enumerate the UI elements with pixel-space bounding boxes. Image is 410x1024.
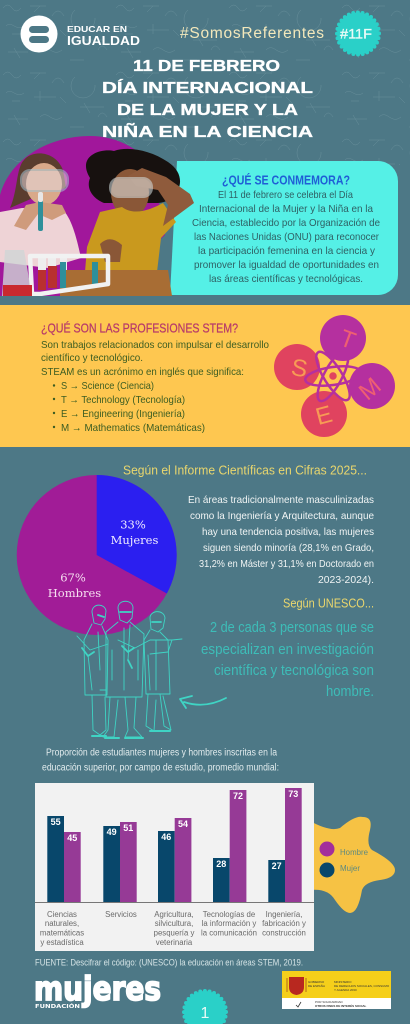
body text: Internacional de la Mujer y la Niña en la — [199, 204, 373, 215]
bar chart: 55 — [51, 817, 61, 827]
list: STEM meanings: T → Technology (Tecnología) — [61, 394, 185, 406]
text block: áreas masculinizadas: siguen siendo minoría (28,1% en Grado, — [203, 542, 374, 554]
text block: áreas masculinizadas: como la Ingeniería y Arquitectura, aunque — [190, 510, 374, 522]
body text — [192, 190, 380, 285]
illustration: girls doing a science experiment — [0, 136, 194, 296]
icon: STEM atom: M — [354, 372, 387, 406]
pie chart: 33% — [120, 518, 146, 532]
title: NIÑA EN LA CIENCIA — [102, 123, 313, 141]
bar chart: la comunicación — [201, 928, 257, 938]
title: 11 DE FEBRERO — [133, 58, 280, 75]
bar chart: 73 — [288, 789, 298, 799]
bar chart: Servicios — [105, 910, 137, 919]
callout: 2 de cada 3: 2 de cada 3 personas que se — [210, 620, 374, 636]
logo: Gobierno de España — [282, 971, 391, 1009]
bar chart: Agricultura, — [154, 910, 194, 919]
bar chart: 46 — [161, 832, 171, 842]
heading: ¿QUÉ SE CONMEMORA? — [222, 172, 350, 188]
panel: ¿Qué se conmemora? — [170, 161, 398, 295]
bar chart: silvicultura, — [155, 919, 193, 928]
bar chart: naturales, — [45, 919, 79, 928]
callout: 2 de cada 3: especializan en investigación — [201, 642, 374, 658]
body text: las Naciones Unidas (ONU) para reconocer — [194, 232, 380, 243]
title: DÍA INTERNACIONAL — [102, 80, 313, 97]
bar chart: 28 — [216, 859, 226, 869]
icon: STEM atom: E — [313, 401, 335, 431]
logo: Gobierno de España: MINISTERIO — [334, 980, 352, 984]
legend star: Hombre — [340, 847, 368, 857]
logo: Gobierno de España: GOBIERNO — [308, 980, 325, 984]
chart caption — [42, 748, 279, 774]
body text: Ciencia, establecido por la Organización de — [192, 218, 380, 229]
chart caption: educación superior, por campo de estudio, promedio mundial: — [42, 762, 279, 774]
page number badge: 1 — [201, 1005, 210, 1022]
heading: Según el Informe: Según el Informe Científicas en Cifras 2025... — [123, 464, 367, 478]
body text: STEAM es un acrónimo en inglés que significa: — [41, 366, 244, 378]
bar chart: 49 — [107, 827, 117, 837]
list: STEM meanings: S → Science (Ciencia) — [61, 380, 154, 392]
logo: Educar en Igualdad: EDUCAR EN — [67, 24, 127, 34]
body text: científico y tecnológico. — [41, 352, 143, 364]
callout: 2 de cada 3: hombre. — [326, 684, 374, 700]
list: STEM meanings — [53, 380, 205, 434]
bar chart: Ingeniería, — [266, 910, 302, 919]
title — [102, 58, 313, 141]
bar chart: 51 — [123, 823, 133, 833]
bar chart: Ciencias — [47, 910, 77, 919]
text block: áreas masculinizadas — [188, 494, 374, 586]
bar chart: 54 — [178, 819, 188, 829]
logo: Fundación Mujeres: FUNDACIÓN — [35, 1003, 80, 1010]
callout: 2 de cada 3: científica y tecnológica son — [214, 663, 374, 679]
bar chart: veterinaria — [156, 938, 193, 947]
logo: Fundación Mujeres: mujeres — [34, 969, 161, 1008]
body text: la participación femenina en la ciencia y — [198, 246, 376, 257]
pie chart: Mujeres — [111, 533, 158, 547]
illustration: three scientists — [77, 601, 182, 738]
title: DE LA MUJER Y LA — [117, 102, 298, 119]
bar chart: construcción — [262, 928, 306, 938]
hashtag: #SomosReferentes — [180, 25, 324, 42]
bar chart: y estadística — [40, 938, 84, 947]
text block: áreas masculinizadas: En áreas tradicionalmente masculinizadas — [188, 494, 374, 506]
pie chart — [17, 475, 177, 635]
bar chart: 72 — [233, 791, 243, 801]
badge: #11F — [337, 12, 379, 54]
bar chart: 27 — [272, 861, 282, 871]
source: FUENTE: Descifrar el código: (UNESCO) la educación en áreas STEM, 2019. — [35, 958, 303, 968]
logo: Gobierno de España: Y AGENDA 2030 — [334, 988, 357, 992]
list: STEM meanings: E → Engineering (Ingeniería) — [61, 408, 185, 420]
bar chart: 45 — [67, 833, 77, 843]
bar chart — [35, 783, 314, 951]
text block: áreas masculinizadas: 2023-2024). — [318, 574, 374, 586]
text block: áreas masculinizadas: 31,2% en Máster y 31,1% en Doctorado en — [199, 558, 374, 570]
list: STEM meanings: M → Mathematics (Matemáticas) — [61, 422, 205, 434]
body text: las áreas científicas y tecnológicas. — [209, 274, 363, 285]
body text — [41, 339, 269, 378]
legend star: Mujer — [340, 863, 360, 873]
text block: áreas masculinizadas: hay una tendencia positiva, las mujeres — [202, 526, 374, 538]
logo: Gobierno de España: DE DERECHOS SOCIALES, CONSUMO — [334, 984, 390, 988]
bar chart: pesquería y — [154, 928, 194, 938]
body text: promover la igualdad de oportunidades en — [194, 260, 379, 271]
page number badge — [184, 991, 226, 1024]
chart caption: Proporción de estudiantes mujeres y hombres inscritas en la — [46, 748, 277, 758]
arrow — [180, 696, 226, 708]
panel: ¿Qué son las profesiones STEM? — [0, 305, 410, 447]
badge: #11F: #11F — [340, 26, 372, 42]
logo: Gobierno de España: DE ESPAÑA — [308, 983, 325, 988]
bar chart: Tecnologías de — [203, 910, 255, 919]
logo: Gobierno de España: POR SOLIDARIDAD — [315, 1000, 344, 1004]
body text: Son trabajos relacionados con impulsar el desarrollo — [41, 339, 269, 351]
heading: Según UNESCO: Según UNESCO... — [283, 596, 374, 610]
legend star — [310, 817, 395, 913]
bar chart: matemáticas — [40, 928, 84, 938]
logo: Educar en Igualdad: IGUALDAD — [67, 34, 140, 48]
bar chart: fabricación y — [262, 919, 306, 928]
body text: El 11 de febrero se celebra el Día — [218, 190, 353, 201]
icon: STEM atom: S — [289, 354, 310, 383]
icon: STEM atom — [274, 315, 395, 437]
pie chart: Hombres — [48, 586, 101, 600]
logo: Educar en Igualdad — [20, 16, 140, 52]
icon: STEM atom: T — [336, 325, 359, 355]
callout: 2 de cada 3 — [201, 620, 374, 700]
heading: ¿QUÉ SON LAS PROFESIONES STEM? — [41, 320, 238, 336]
bar chart: la información y — [202, 919, 256, 928]
logo: Gobierno de España: OTROS FINES DE INTERÉS SOCIAL — [315, 1003, 367, 1008]
pie chart: 67% — [60, 570, 86, 584]
